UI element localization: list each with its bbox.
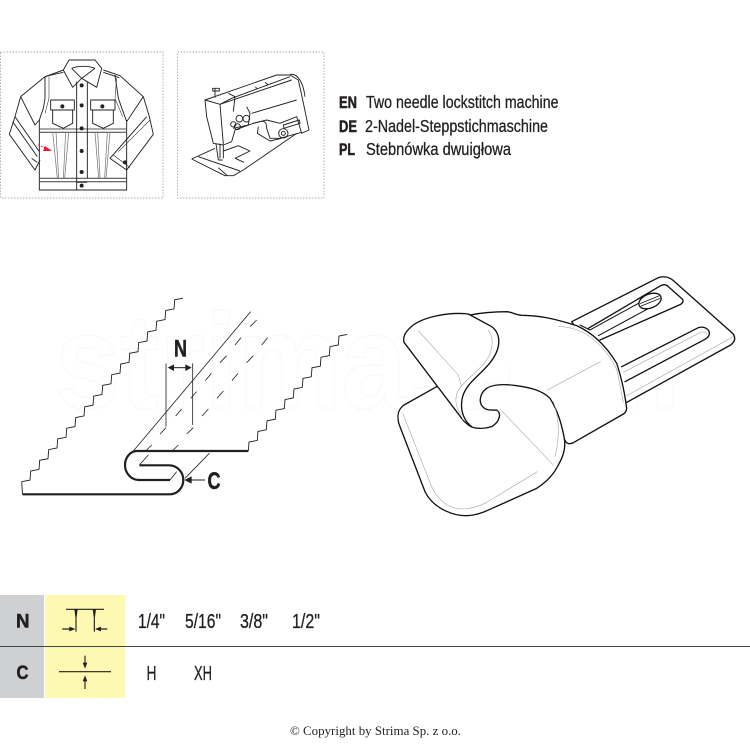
values N: 1/2" bbox=[292, 611, 320, 633]
C pointer arrow bbox=[184, 476, 205, 484]
row N bbox=[16, 609, 320, 633]
label N: N bbox=[174, 336, 187, 362]
lower folding plate bbox=[398, 385, 565, 516]
mounting plate bbox=[572, 277, 735, 403]
label: English: EN bbox=[339, 93, 357, 112]
icon: red arrow bbox=[38, 145, 52, 151]
values C: XH bbox=[194, 663, 212, 685]
row header cells bbox=[0, 595, 44, 698]
adjusting screw bbox=[637, 290, 663, 312]
label: Polish: PL bbox=[339, 140, 355, 159]
row N: N bbox=[16, 610, 30, 632]
icon: sewing machine illustration bbox=[192, 74, 309, 176]
label: English: Two needle lockstitch machine bbox=[366, 92, 558, 112]
N dimension arrow bbox=[168, 364, 192, 371]
flap inner lines bbox=[418, 330, 492, 415]
values C bbox=[146, 663, 212, 685]
folder body inner edge bbox=[547, 327, 623, 402]
illustration: folder attachment bbox=[398, 277, 735, 516]
row C: C bbox=[16, 662, 28, 684]
label C: C bbox=[208, 468, 220, 495]
values N: 3/8" bbox=[240, 611, 268, 633]
left serrated fabric edge bbox=[22, 298, 183, 494]
right serrated fabric edge bbox=[248, 334, 347, 451]
label: Polish: Stebnówka dwuigłowa bbox=[366, 139, 511, 159]
copyright: © Copyright by Strima Sp. z o.o. bbox=[290, 723, 461, 738]
text block: machine names bbox=[339, 92, 558, 159]
label: German: DE bbox=[339, 117, 357, 136]
values C: H bbox=[146, 663, 156, 685]
seam diagram bbox=[22, 298, 347, 495]
table: size chart bbox=[0, 595, 750, 698]
values N: 5/16" bbox=[185, 611, 221, 633]
label: German: 2-Nadel-Steppstichmaschine bbox=[365, 116, 548, 136]
panel: jacket bbox=[0, 52, 163, 198]
lower plate inner lines bbox=[403, 402, 558, 509]
icon: C measure bbox=[59, 656, 111, 689]
icon column background bbox=[45, 595, 125, 698]
folder body bbox=[470, 312, 627, 444]
row divider bbox=[0, 646, 750, 648]
values N: 1/4" bbox=[138, 611, 165, 633]
folded seam profile bbox=[22, 451, 248, 494]
upper curled flap bbox=[404, 313, 499, 427]
row C bbox=[16, 656, 212, 689]
values N bbox=[138, 611, 320, 633]
stitch lines bbox=[133, 312, 268, 484]
panel: sewing machine bbox=[178, 52, 324, 198]
icon: N measure bbox=[62, 609, 107, 632]
icon: jacket illustration bbox=[9, 60, 153, 190]
